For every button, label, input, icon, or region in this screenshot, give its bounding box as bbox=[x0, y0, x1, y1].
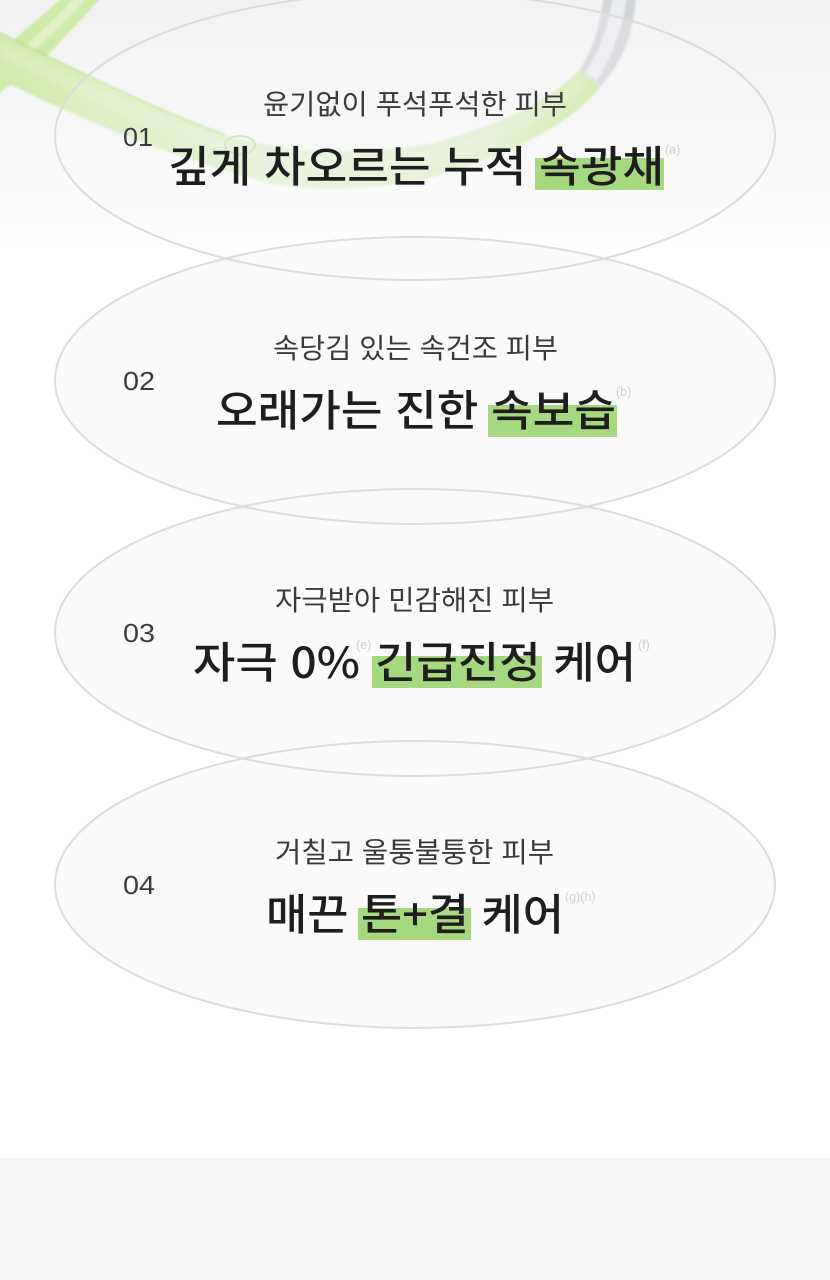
ellipse 02 bbox=[55, 237, 775, 524]
subtitle 02: 속당김 있는 속건조 피부 bbox=[273, 327, 558, 367]
background top gradient bbox=[0, 0, 830, 250]
heading 02: 오래가는 진한 속보습 bbox=[216, 377, 616, 439]
ellipse 04 bbox=[55, 741, 775, 1028]
heading 03 part one: 자극 0% bbox=[193, 629, 360, 691]
subtitle 03: 자극받아 민감해진 피부 bbox=[275, 579, 554, 619]
footnote f: (f) bbox=[638, 638, 650, 652]
ellipse 01 bbox=[55, 0, 775, 280]
number 01: 01 bbox=[123, 122, 153, 152]
photo: green tube bbox=[0, 0, 636, 189]
subtitle 04: 거칠고 울퉁불퉁한 피부 bbox=[275, 831, 554, 871]
heading 04: 매끈 톤+결 케어 bbox=[266, 881, 564, 943]
footnotes g h: (g)(h) bbox=[565, 890, 596, 904]
subtitle 01: 윤기없이 푸석푸석한 피부 bbox=[263, 83, 567, 123]
number 03: 03 bbox=[123, 618, 155, 648]
highlight 02 bbox=[488, 405, 617, 437]
number 02: 02 bbox=[123, 366, 155, 396]
highlight 04 bbox=[358, 908, 471, 940]
highlight 01 bbox=[535, 158, 664, 190]
panel: item 02 bbox=[55, 237, 775, 524]
footnote e: (e) bbox=[356, 638, 371, 652]
heading 03 part two: 긴급진정 케어 bbox=[375, 629, 636, 691]
panel: bottom band bbox=[0, 1158, 830, 1280]
footnote b: (b) bbox=[616, 385, 631, 399]
panel: item 01 bbox=[55, 0, 775, 280]
heading 01: 깊게 차오르는 누적 속광채 bbox=[168, 133, 664, 195]
panel: item 04 bbox=[55, 741, 775, 1028]
ellipse 03 bbox=[55, 489, 775, 776]
ellipse fills bbox=[55, 0, 775, 1028]
highlight 03 bbox=[372, 656, 542, 688]
number 04: 04 bbox=[123, 870, 155, 900]
panel: item 03 bbox=[55, 489, 775, 776]
footnote a: (a) bbox=[665, 143, 680, 157]
